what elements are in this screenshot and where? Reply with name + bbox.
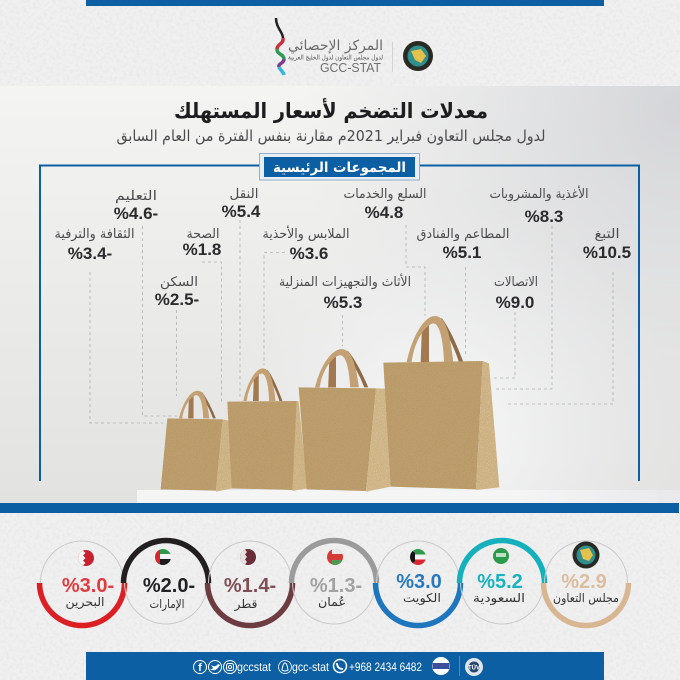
illustration: four jute bags [161,316,499,492]
icon: instagram [224,660,236,674]
ring: Bahrain: %3.0- [62,575,114,597]
ring: Qatar: %1.4- [224,575,276,597]
logo: GCC-STAT [276,18,433,75]
ring: Kuwait: %3.0 [396,571,442,593]
category: culture and recreation: %3.4- [68,244,112,263]
category: furniture and household equipment [279,273,411,312]
logo name in Arabic: المركز الإحصائي [288,38,383,54]
icon: certification seal [432,657,450,675]
ring: Bahrain: البحرين [66,595,104,610]
title: معدلات التضخم لأسعار المستهلك [174,97,488,123]
category: communications: %9.0 [496,293,534,312]
category: communications: الاتصالات [494,275,538,290]
footer bar [86,652,604,680]
category: food and beverages [490,185,588,226]
heading badge: main groups: المجموعات الرئيسية [273,160,406,176]
category: housing: %2.5- [155,290,199,309]
category: tobacco: التبغ [594,227,620,242]
icon: twitter [208,660,222,674]
category: health [183,227,221,259]
middle blue band [0,503,679,513]
frame around main groups [40,166,639,481]
category: goods and services [344,187,426,222]
country rings [40,540,628,626]
category: clothing and footwear [262,225,350,263]
category: food and beverages: %8.3 [525,207,563,226]
category: housing [155,275,199,309]
icon: facebook: f [198,662,202,674]
category: health: %1.8 [183,240,221,259]
category: transport: %5.4 [222,202,261,221]
ring: Oman: عُمان [318,595,346,609]
phone number: +968 2434 6482 [349,660,422,674]
social handle: gccstat [237,660,272,674]
ring: UAE [124,540,208,624]
ring: UAE: %2.0- [143,575,195,597]
ring: Kuwait: الكويت [403,591,441,606]
category: clothing and footwear: %3.6 [290,244,328,263]
ring: Bahrain [40,541,124,626]
category: culture and recreation [54,227,134,263]
ring: GCC [544,541,628,626]
category: restaurants and hotels: المطاعم والفنادق [416,227,510,242]
category: transport: النقل [230,187,258,202]
category: goods and services: السلع والخدمات [344,187,426,202]
icon: whatsapp [334,660,346,672]
icon: facebook [194,660,206,674]
category: furniture and household equipment: الأثاث والتجهيزات المنزلية [279,273,411,290]
category: transport [222,187,261,221]
ring: Saudi Arabia: السعودية [473,591,525,606]
shelf [137,490,680,504]
category: education: التعليم [115,189,157,204]
category: health: الصحة [186,227,220,242]
dashed connector lines [90,220,613,423]
icon: ribbon [276,18,284,75]
category: furniture and household equipment: %5.3 [324,293,362,312]
category: tobacco: %10.5 [583,243,631,262]
subtitle: لدول مجلس التعاون فبراير 2021م مقارنة بنفس الفترة من العام السابق [116,127,546,145]
category: restaurants and hotels: %5.1 [443,243,481,262]
ring: Saudi Arabia [460,540,544,624]
category: education: %4.6- [114,204,158,223]
category: clothing and footwear: الملابس والأحذية [262,225,350,242]
ring: GCC: %2.9 [561,571,607,593]
ring: GCC: مجلس التعاون [553,591,619,606]
top blue bar [86,0,604,6]
central panel [0,86,680,504]
category: communications [494,275,538,312]
category: restaurants and hotels [416,227,510,262]
icon: TUV seal [465,658,483,676]
snapchat handle: gcc-stat [292,660,330,674]
ring: Kuwait [376,541,460,626]
category: food and beverages: الأغذية والمشروبات [490,185,588,202]
heading badge: main groups [260,154,420,180]
logo subtitle: لدول مجلس التعاون لدول الخليج العربية [288,54,383,62]
icon: snapchat [278,660,292,674]
icon: GCC emblem [403,41,433,71]
category: tobacco [583,227,631,262]
ring: Qatar: قطر [233,597,258,612]
logo latin name: GCC-STAT [320,60,381,75]
category: goods and services: %4.8 [365,203,403,222]
ring: Oman [292,540,376,624]
ring: Oman: %1.3- [310,575,362,597]
ring: UAE: الإمارات [150,597,184,612]
icon: TUV seal: TÜV [468,664,480,672]
category: culture and recreation: الثقافة والترفية [54,227,134,242]
category: housing: السكن [160,275,198,290]
ring: Saudi Arabia: %5.2 [477,571,523,593]
ring: Qatar [208,541,292,626]
category: education [114,189,158,223]
